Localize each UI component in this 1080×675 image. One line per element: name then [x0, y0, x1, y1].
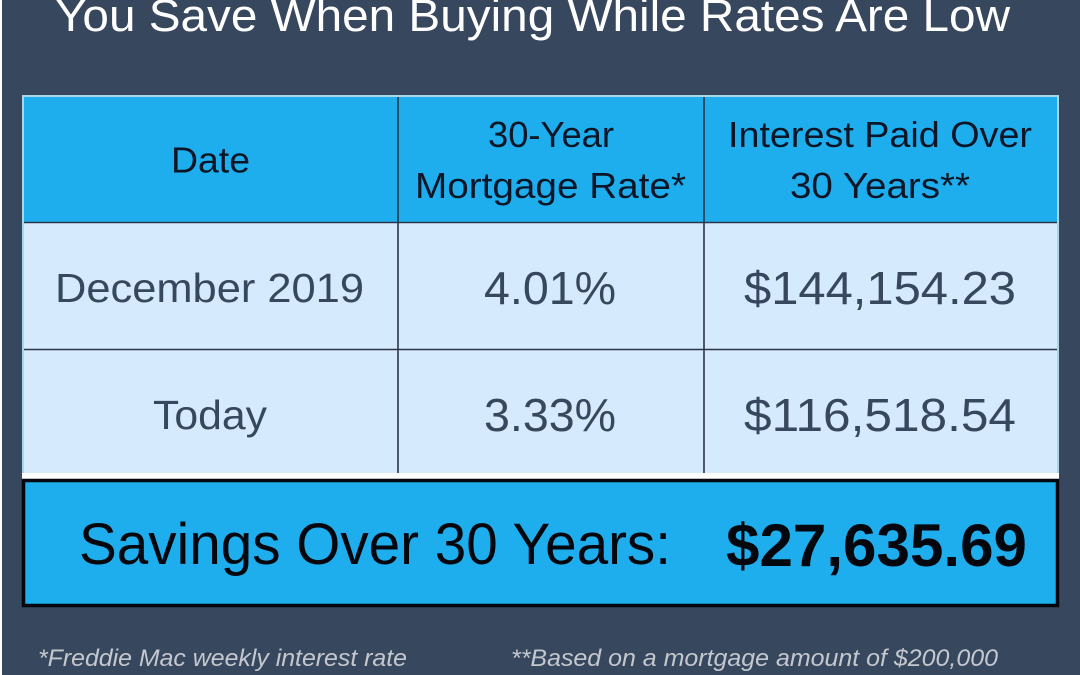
header: 30-Year Mortgage Rate: 30-Year — [488, 114, 614, 155]
table frame — [22, 95, 1059, 474]
table row: Today — [24, 350, 1057, 473]
rate: 4.01%: 4.01% — [484, 262, 616, 314]
comparison table — [22, 95, 1059, 480]
banner amount: $27,635.69 — [726, 512, 1027, 579]
table header row — [24, 97, 1057, 222]
row label: December 2019: December 2019 — [55, 265, 364, 311]
table bottom white edge — [22, 473, 1059, 480]
row label: Today: Today — [153, 392, 268, 438]
header: Interest Paid Over 30 Years — [728, 114, 1032, 206]
interest: $116,518.54: $116,518.54 — [744, 389, 1016, 441]
header: Interest Paid Over 30 Years: 30 Years** — [790, 165, 970, 206]
header: Date: Date — [171, 140, 250, 180]
banner label: Savings Over 30 Years: — [79, 512, 671, 577]
rate: 3.33%: 3.33% — [484, 389, 616, 441]
header: 30-Year Mortgage Rate — [415, 114, 686, 206]
savings banner — [24, 480, 1058, 606]
header: Interest Paid Over 30 Years: Interest Paid Over — [728, 114, 1032, 155]
table grid lines — [24, 97, 1057, 473]
interest: $144,154.23: $144,154.23 — [744, 262, 1016, 314]
banner box — [24, 480, 1058, 606]
footnote: Freddie Mac: *Freddie Mac weekly interest rate — [38, 645, 407, 672]
footnote: mortgage amount: **Based on a mortgage amount of $200,000 — [511, 645, 999, 672]
table row: December 2019 — [24, 223, 1057, 349]
header: 30-Year Mortgage Rate: Mortgage Rate* — [415, 165, 686, 206]
